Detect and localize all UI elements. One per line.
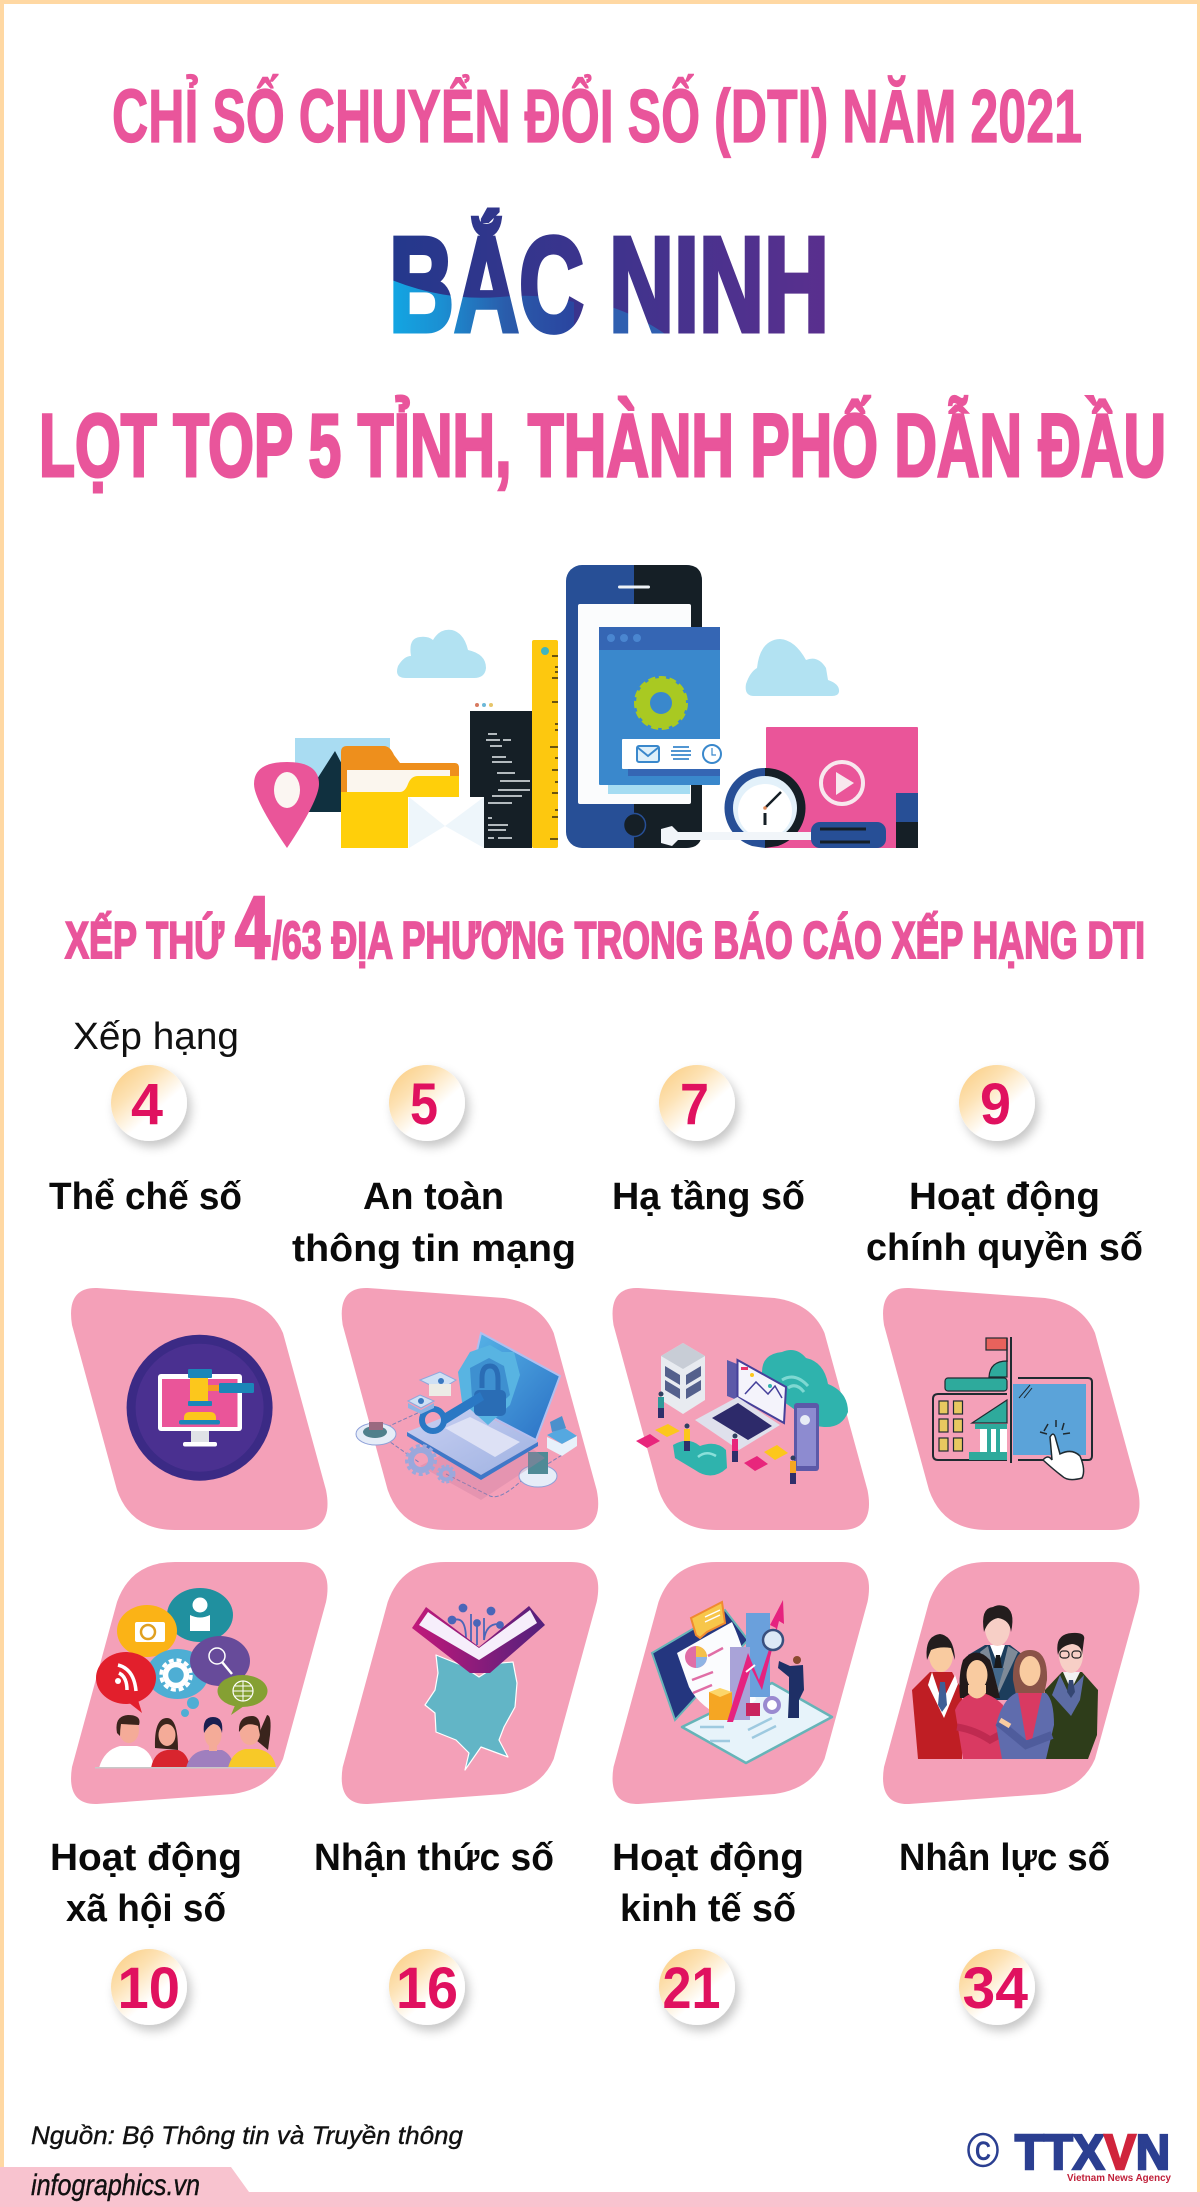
icon: laptop with shield and key bbox=[356, 1333, 577, 1500]
logo: TTXVN bbox=[968, 2126, 1171, 2184]
panel: digital infrastructure bbox=[613, 1288, 869, 1530]
panel: digital institutions bbox=[71, 1288, 328, 1530]
logo wordmark: TTXVN bbox=[1015, 2126, 1170, 2180]
icon: smartphone bbox=[566, 565, 702, 848]
subheading: first words: XẾP THỨ bbox=[65, 911, 225, 970]
subheading: rank number: 4 bbox=[235, 878, 270, 977]
panel: digital government bbox=[883, 1288, 1140, 1530]
label: Hoạt động kinh tế số: kinh tế số bbox=[620, 1888, 796, 1930]
icon: people with social bubbles bbox=[95, 1588, 277, 1768]
rank badge 21: 21 bbox=[662, 1956, 720, 2021]
rank badge 9 bbox=[959, 1065, 1035, 1141]
rank badge 34: 34 bbox=[962, 1956, 1028, 2021]
panel: digital economy bbox=[613, 1562, 869, 1804]
icon: ruler bbox=[532, 640, 558, 848]
label: Nhân lực số: Nhân lực số bbox=[899, 1837, 1110, 1879]
panel: digital awareness bbox=[342, 1562, 598, 1804]
icon: screwdriver bbox=[661, 822, 886, 848]
icon: code window bbox=[470, 703, 532, 848]
icon: four people bbox=[95, 1715, 277, 1768]
rank badge 16: 16 bbox=[396, 1956, 458, 2021]
bubble: camera bbox=[117, 1605, 177, 1657]
bubble: globe bbox=[218, 1675, 268, 1715]
icon: circuit bbox=[448, 1604, 503, 1645]
icon: head with open book bbox=[412, 1604, 545, 1770]
icon: app window with gear bbox=[599, 627, 722, 794]
icon: folder bbox=[341, 746, 459, 848]
icon: tiny people bbox=[658, 1392, 796, 1484]
icon: left cloud bbox=[397, 630, 486, 678]
icon: envelope bbox=[409, 797, 484, 848]
label: Hoạt động xã hội số bbox=[50, 1837, 242, 1930]
website label: infographics.vn bbox=[31, 2169, 200, 2202]
label: Hoạt động xã hội số: Hoạt động bbox=[50, 1837, 242, 1879]
icon: right cloud bbox=[746, 639, 839, 696]
bubble: person bbox=[167, 1588, 233, 1642]
icon: video player bbox=[766, 727, 918, 848]
label: Hoạt động kinh tế số: Hoạt động bbox=[612, 1837, 804, 1879]
panel background bbox=[613, 1288, 869, 1530]
label: Thể chế số: Thể chế số bbox=[49, 1176, 242, 1218]
rank badge 7: 7 bbox=[680, 1072, 709, 1137]
panel: digital society bbox=[71, 1562, 328, 1804]
icon: cloud data center bbox=[636, 1343, 848, 1484]
person: left man bbox=[912, 1634, 962, 1759]
icon: green gear bbox=[636, 678, 686, 728]
rank badge 10: 10 bbox=[118, 1956, 180, 2021]
label: Hoạt động chính quyền số: chính quyền số bbox=[866, 1227, 1143, 1269]
bubble: gear bbox=[146, 1649, 208, 1699]
label: ranking caption: Xếp hạng bbox=[73, 1016, 239, 1058]
source note: Nguồn: Bộ Thông tin và Truyền thông bbox=[31, 2122, 463, 2150]
label: An toàn thông tin mạng: thông tin mạng bbox=[292, 1228, 576, 1270]
icon: photo bbox=[295, 738, 390, 812]
panel background bbox=[71, 1288, 328, 1530]
rank badge 5 bbox=[389, 1065, 465, 1141]
person: back man bbox=[968, 1605, 1023, 1700]
panel background bbox=[342, 1562, 598, 1804]
label: Hoạt động kinh tế số bbox=[612, 1837, 804, 1930]
logo tagline: Vietnam News Agency bbox=[1067, 2173, 1171, 2184]
rank badge 5: 5 bbox=[410, 1072, 438, 1137]
icon: businessman bbox=[778, 1656, 804, 1718]
panel: information security bbox=[342, 1288, 598, 1530]
rank badge 4: 4 bbox=[131, 1072, 163, 1137]
label: Hoạt động xã hội số: xã hội số bbox=[66, 1888, 226, 1930]
panel background bbox=[71, 1562, 328, 1804]
subheading: ranking statement bbox=[65, 878, 1145, 977]
bubble: search bbox=[190, 1636, 250, 1686]
icon: copyright mark: C bbox=[975, 2136, 991, 2166]
hero illustration: phone and digital devices bbox=[254, 565, 918, 848]
panel background bbox=[883, 1562, 1140, 1804]
panel: digital workforce bbox=[883, 1562, 1140, 1804]
chart: pie bbox=[685, 1646, 707, 1668]
rank badge 7 bbox=[659, 1065, 735, 1141]
panel background bbox=[342, 1288, 598, 1530]
rank badge 4 bbox=[111, 1065, 187, 1141]
icon: government building and touchscreen bbox=[933, 1337, 1092, 1480]
icon: analytics on laptop bbox=[652, 1600, 832, 1763]
bubble: wifi bbox=[96, 1652, 156, 1713]
icon: copyright mark bbox=[968, 2134, 998, 2166]
footer band bbox=[0, 2167, 1200, 2207]
label: Hoạt động chính quyền số bbox=[866, 1176, 1143, 1269]
label: Nhận thức số: Nhận thức số bbox=[314, 1837, 554, 1879]
icon: location pin bbox=[254, 762, 319, 848]
rank badge 9: 9 bbox=[980, 1072, 1011, 1137]
label: An toàn thông tin mạng bbox=[292, 1176, 576, 1270]
icon: gauge bbox=[724, 768, 806, 848]
icon: speech card bbox=[691, 1602, 725, 1638]
person: woman in blue bbox=[996, 1650, 1054, 1759]
panel background bbox=[883, 1288, 1140, 1530]
icon: team of five professionals bbox=[912, 1605, 1098, 1759]
icon: gavel on monitor bbox=[127, 1335, 273, 1481]
person: right man bbox=[1045, 1633, 1098, 1759]
panel background bbox=[613, 1562, 869, 1804]
title: province name: BẮC NINH bbox=[389, 209, 829, 360]
label: Hoạt động chính quyền số: Hoạt động bbox=[909, 1176, 1100, 1218]
person: woman in pink bbox=[955, 1652, 1004, 1759]
label: Hạ tầng số: Hạ tầng số bbox=[612, 1176, 805, 1218]
label: An toàn thông tin mạng: An toàn bbox=[363, 1176, 504, 1218]
